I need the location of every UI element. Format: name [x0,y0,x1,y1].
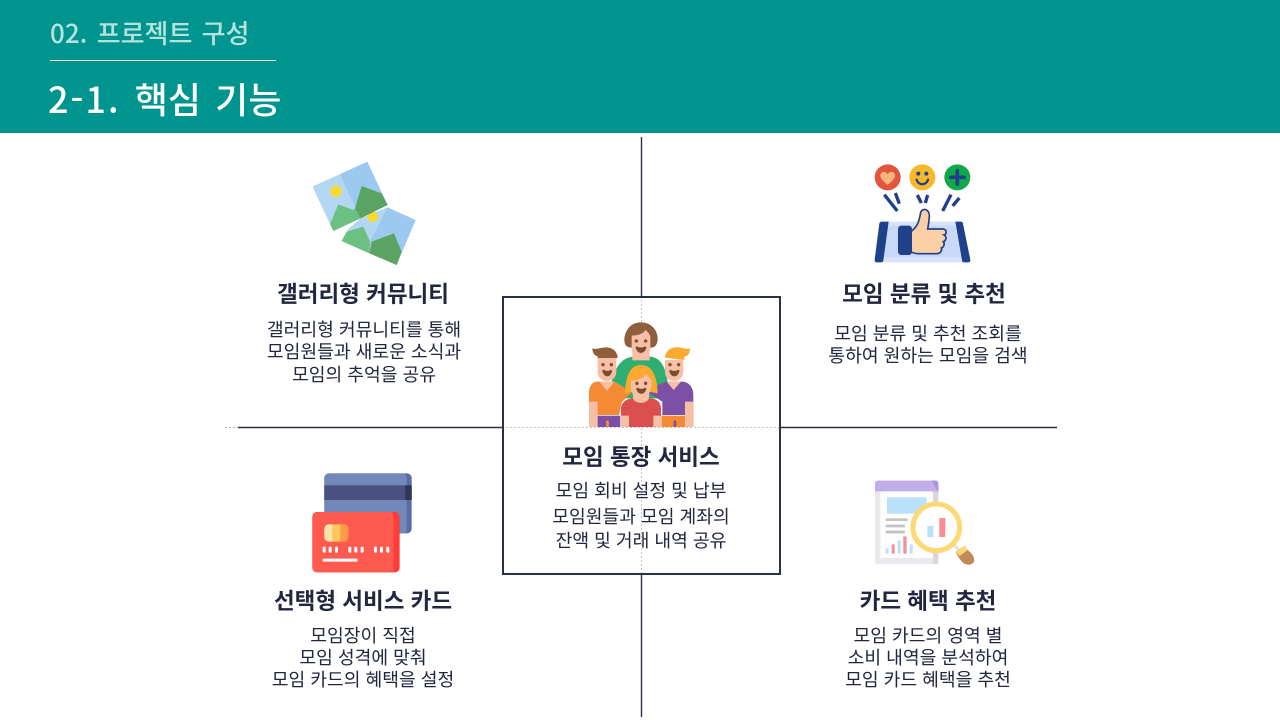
heading: selectable service card: 선택형 서비스 카드 [274,589,452,614]
text: selectable service card: 모임 성격에 맞춰 [299,648,427,668]
text: card benefit recommendation [845,626,1011,690]
heading: group classification: 모임 분류 및 추천 [842,282,1006,307]
text: selectable service card: 모임 카드의 혜택을 설정 [272,670,454,690]
text: card benefit recommendation: 소비 내역을 분석하여 [848,648,1008,668]
panel: center box [502,296,780,574]
title: 2-1. 핵심 기능 [48,72,281,124]
text: group account: 잔액 및 거래 내역 공유 [556,531,726,551]
text: gallery community: 모임의 추억을 공유 [292,364,436,384]
text: group classification: 통하여 원하는 모임을 검색 [828,346,1028,366]
text: group classification: 모임 분류 및 추천 조회를 [834,324,1022,344]
text: card benefit recommendation: 모임 카드의 영역 별 [853,626,1003,646]
heading: gallery community: 갤러리형 커뮤니티 [277,282,449,307]
front person [621,398,661,427]
text: group account: 모임 회비 설정 및 납부 [556,481,726,501]
text: gallery community: 모임원들과 새로운 소식과 [267,342,461,362]
header band [0,0,1280,133]
text: group account [552,481,730,551]
text: group classification [828,324,1028,366]
text: selectable service card: 모임장이 직접 [310,626,416,646]
right person [646,382,693,415]
left person [589,382,632,415]
text: gallery community [267,320,461,384]
text: selectable service card [272,626,454,690]
section label: 02. 프로젝트 구성 [50,14,250,51]
text: card benefit recommendation: 모임 카드 혜택을 추천 [845,670,1011,690]
text: group account: 모임원들과 모임 계좌의 [552,507,730,527]
heading: card benefit recommendation: 카드 혜택 추천 [860,589,996,614]
text: gallery community: 갤러리형 커뮤니티를 통해 [267,320,461,340]
heading: group account: 모임 통장 서비스 [562,445,720,470]
